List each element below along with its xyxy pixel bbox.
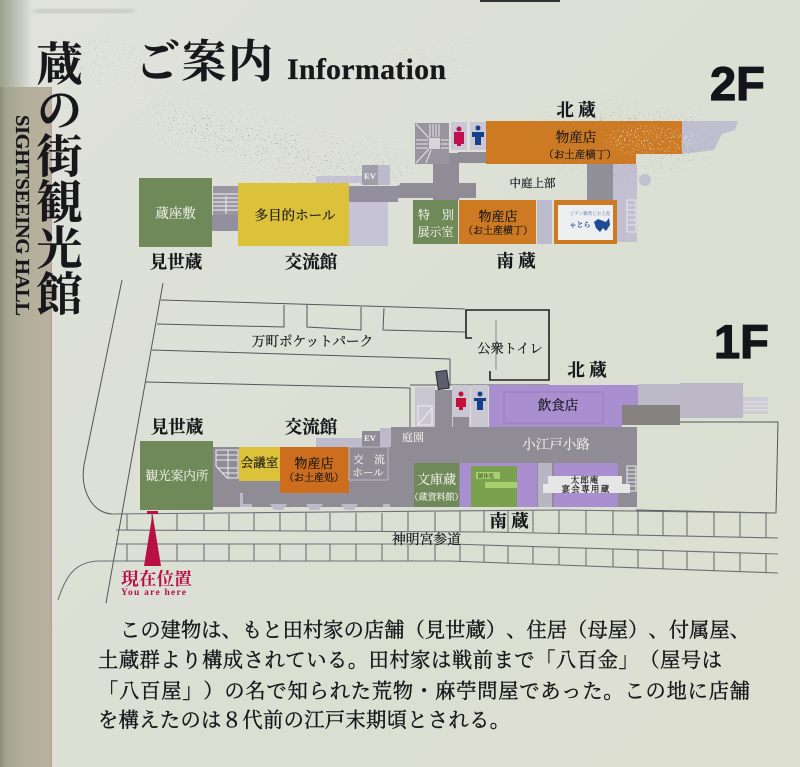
current position marker: 現在位置 [121, 569, 192, 589]
description text: を構えたのは８代前の江戸末期頃とされる。 [98, 709, 510, 732]
description text [98, 619, 750, 732]
room: 宴会専用蔵: 宴会専用蔵 [561, 484, 611, 494]
label 庭園: 庭園 [402, 431, 424, 444]
1F building labels [151, 360, 607, 531]
shop: 飲食店 [489, 385, 638, 427]
label 交流ホール: 交 流 [353, 453, 385, 466]
room: 文庫蔵 [409, 463, 464, 507]
heading: ご案内: ご案内 [135, 37, 273, 87]
entrances [240, 493, 390, 510]
room: 観光案内所 [140, 441, 213, 510]
1F building labels: 北 蔵 [567, 360, 607, 380]
2F building labels: 南 蔵 [496, 251, 536, 271]
room: 文庫蔵: （蔵資料館） [409, 491, 464, 502]
toilet icon: men 1F [474, 392, 486, 410]
shop: south 物産店: 物産店 [478, 209, 518, 224]
pavement [58, 510, 778, 600]
stairs south east 2F [627, 200, 636, 232]
2F building labels [150, 100, 596, 272]
room: purple south with green sign [460, 463, 537, 507]
label 交流ホール: ホール [352, 468, 384, 479]
1F building labels: 交流館 [285, 417, 338, 437]
1F corridors and wings [213, 370, 768, 507]
shop sign card [554, 200, 617, 244]
toilet icon: women 1F [456, 392, 466, 410]
label 神明宮参道: 神明宮参道 [392, 531, 461, 547]
stairs 1F west [216, 450, 238, 478]
site outline lines [83, 280, 778, 603]
EV label 2F: EV [364, 171, 377, 181]
EV label 1F: EV [364, 433, 377, 443]
label 交流ホール [349, 447, 388, 480]
2F building labels: 交流館 [285, 252, 338, 272]
room: 蔵座敷: 蔵座敷 [155, 205, 196, 221]
description text: 「八百屋」）の名で知られた荒物・麻苧問屋であった。この地に店舗 [98, 680, 750, 703]
room: 観光案内所: 観光案内所 [146, 468, 209, 483]
2F building labels: 北 蔵 [556, 100, 596, 120]
floor plan: 1F [140, 360, 768, 531]
current position marker: You are here [121, 588, 186, 598]
room: 会議室 [239, 447, 280, 481]
stairs 1F east [627, 466, 636, 491]
toilet icon: men 2F [470, 122, 486, 150]
2F building labels: 見世蔵 [150, 252, 203, 272]
1F building labels: 南 蔵 [489, 511, 529, 531]
room: 多目的ホール [238, 183, 349, 246]
room: 特別展示室: 特 別 [418, 207, 454, 222]
floor label 2F: 2F [710, 57, 765, 110]
label 公衆トイレ: 公衆トイレ [477, 341, 543, 356]
floor plan: 2F [139, 100, 738, 272]
room: purple south with green sign: 御休処 [478, 472, 495, 480]
room: 文庫蔵: 文庫蔵 [417, 472, 456, 487]
shop sign card: ジアン雑貨とお土産 [570, 210, 611, 217]
room: 多目的ホール: 多目的ホール [255, 208, 336, 223]
label 中庭上部: 中庭上部 [510, 176, 556, 190]
shop: 物産店 1F [280, 447, 349, 493]
vertical title: 蔵の街観光館 [30, 40, 82, 316]
room: 宴会専用蔵: 太郎庵 [571, 475, 599, 485]
public toilet outline [466, 310, 549, 380]
room: 宴会専用蔵 [543, 463, 630, 507]
room: 特別展示室: 展示室 [417, 225, 454, 239]
vertical English subtitle: SIGHTSEEING HALL [11, 115, 33, 316]
room: 会議室: 会議室 [241, 455, 278, 470]
floor label 1F: 1F [714, 315, 769, 368]
shop sign card: ゃとら [570, 220, 590, 229]
passage south [538, 463, 552, 507]
current position marker [121, 511, 192, 598]
heading: Information: Information [287, 53, 446, 86]
label 小江戸小路: 小江戸小路 [522, 437, 590, 452]
paper speckle wear [60, 30, 722, 196]
label 万町ポケットパーク: 万町ポケットパーク [252, 334, 373, 349]
left taupe band [0, 87, 52, 767]
room: 蔵座敷 [139, 178, 212, 247]
shop: north 物産店: 物産店 [556, 129, 596, 145]
shop: north 物産店 [486, 121, 682, 164]
shop: south 物産店 [459, 200, 536, 244]
stair block 2F [415, 123, 449, 164]
shop: 物産店 1F: 物産店 [294, 456, 334, 471]
2F circulation and lavender areas [316, 121, 738, 246]
shop: 物産店 1F: （お土産処） [284, 471, 344, 484]
1F building labels: 見世蔵 [151, 417, 204, 437]
room: 特別展示室 [413, 200, 458, 244]
shop: south 物産店: （お土産横丁） [463, 224, 533, 237]
description text: 土蔵群より構成されている。田村家は戦前まで「八百金」（屋号は [98, 649, 722, 672]
shop: 飲食店: 飲食店 [538, 397, 578, 413]
shop: north 物産店: （お土産横丁） [543, 148, 617, 161]
stairs to hall [212, 186, 238, 231]
description text: この建物は、もと田村家の店舗（見世蔵）、住居（母屋）、付属屋、 [120, 619, 750, 642]
toilet icon: women 2F [451, 122, 467, 150]
